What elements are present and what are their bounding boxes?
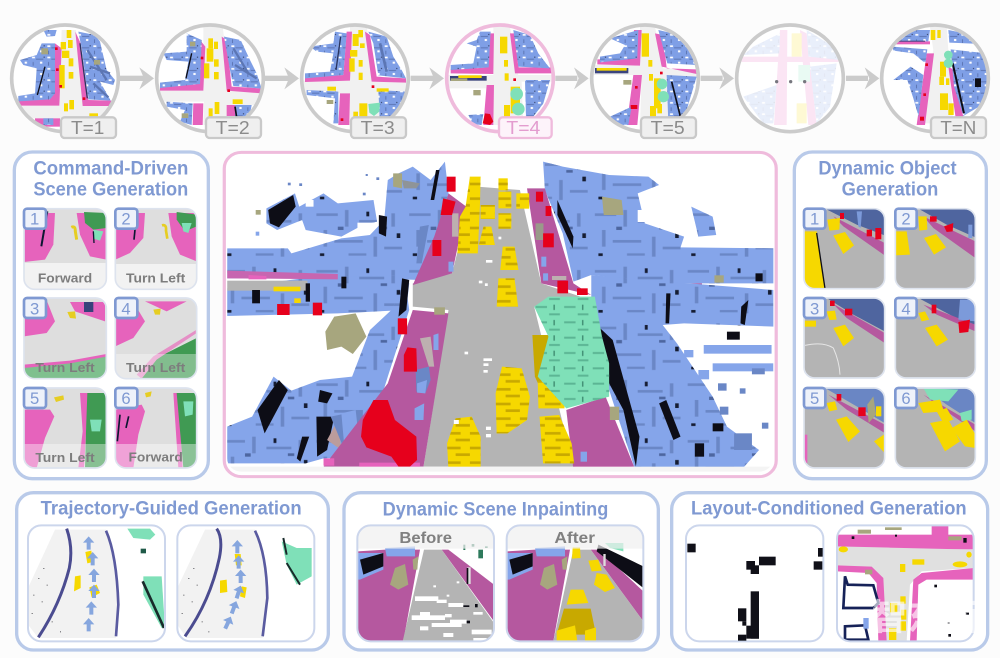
label T=N: T=N	[940, 117, 976, 138]
heading: command-driven: Command-Driven	[33, 159, 188, 180]
label T=1: T=1	[71, 117, 104, 138]
thumb: after	[507, 525, 643, 641]
badge 4: 4	[901, 299, 911, 318]
trees	[534, 297, 609, 408]
thumb 3 turn left	[24, 298, 106, 379]
arrow 5 to intermediate	[701, 67, 734, 89]
frame T=5	[592, 25, 700, 138]
road debris	[454, 237, 501, 437]
arrow intermediate to N	[846, 67, 879, 89]
upper-left buildings	[227, 162, 448, 280]
watermark: 智东西	[872, 589, 978, 641]
heading: command-driven: Scene Generation	[33, 180, 188, 201]
arrow 3 to 4	[411, 67, 444, 89]
thumb 4	[895, 298, 975, 378]
thumb 3	[804, 298, 885, 378]
heading: dynamic object	[818, 159, 957, 201]
arrow 4 to 5	[555, 67, 589, 89]
badge 2: 2	[901, 210, 911, 229]
command text: Turn Left	[35, 451, 96, 465]
badge 4: 4	[121, 299, 131, 318]
badge 2: 2	[121, 210, 131, 229]
ellipsis dots	[775, 80, 806, 83]
panel: dynamic object generation	[794, 152, 986, 479]
frame: intermediate steps (faded)	[737, 25, 843, 132]
vegetation clump	[256, 173, 420, 354]
badge 6: 6	[121, 389, 131, 408]
badge 1: 1	[810, 210, 819, 229]
panel: layout-conditioned generation	[672, 493, 988, 650]
frame T=1	[10, 25, 118, 138]
badge 1: 1	[30, 210, 39, 229]
frame T=4 (highlighted)	[447, 25, 553, 138]
lower-left buildings	[227, 278, 409, 463]
thumb 1	[804, 209, 885, 289]
pedestrians and small objects	[415, 213, 619, 462]
panel: main 3D voxel scene	[224, 152, 776, 477]
trajectory arrows left	[83, 536, 100, 631]
panel: command-driven scene generation	[14, 152, 208, 479]
cars	[447, 177, 574, 470]
thumb 4 turn left	[115, 298, 197, 379]
thumb 2 turn left	[115, 209, 197, 290]
arrow 1 to 2	[120, 67, 154, 89]
far-left scattered buildings	[256, 174, 379, 237]
thumb: before	[357, 525, 494, 641]
thumb 6 forward	[115, 388, 197, 468]
thumb 1 forward	[24, 209, 106, 290]
thumb 2	[895, 209, 975, 289]
label T=2: T=2	[216, 117, 250, 138]
frame T=3	[302, 25, 408, 138]
thumb: trajectory right	[177, 525, 314, 641]
thumb 5 turn left	[24, 388, 106, 468]
timeline: top view frames T=1 to T=N	[10, 25, 989, 138]
label: After: After	[554, 530, 595, 547]
command text: Turn Left	[126, 361, 186, 375]
arrow 2 to 3	[265, 67, 299, 89]
red pedestrians	[361, 177, 588, 467]
heading: dynamic object: Generation	[842, 180, 938, 201]
heading: command-driven	[33, 159, 188, 201]
thumb 5	[804, 388, 885, 468]
badge 5: 5	[810, 389, 819, 408]
heading: trajectory-guided: Trajectory-Guided Generation	[41, 499, 302, 520]
command text: Forward	[38, 271, 92, 285]
badge 5: 5	[30, 389, 39, 408]
badge 6: 6	[901, 389, 911, 408]
panel: dynamic scene inpainting	[344, 493, 658, 650]
upper-right buildings	[543, 162, 774, 288]
heading: inpainting: Dynamic Scene Inpainting	[383, 500, 608, 521]
command text: Turn Left	[35, 361, 96, 375]
frame T=N	[882, 25, 989, 138]
command text: Turn Left	[126, 271, 186, 285]
command text: Forward	[128, 450, 183, 464]
label: Before: Before	[399, 530, 452, 547]
heading: layout-conditioned: Layout-Conditioned Generation	[691, 499, 967, 520]
badge 3: 3	[30, 299, 39, 318]
thumb: generated top view	[837, 525, 978, 641]
thumb: occupancy layout	[686, 525, 823, 641]
label T=5: T=5	[651, 117, 685, 138]
cross-street band left	[227, 271, 409, 316]
frame T=2	[157, 25, 263, 138]
heading: dynamic object: Dynamic Object	[818, 159, 957, 180]
thumb: trajectory left	[28, 525, 165, 641]
road	[413, 187, 581, 467]
label T=4: T=4	[506, 117, 540, 138]
trajectory arrows right	[220, 540, 246, 631]
sidewalks	[324, 188, 634, 470]
label T=3: T=3	[361, 117, 395, 138]
thumb 6	[895, 388, 975, 468]
badge 3: 3	[810, 299, 819, 318]
lower-right buildings	[591, 275, 774, 470]
panel: trajectory-guided generation	[17, 493, 328, 650]
